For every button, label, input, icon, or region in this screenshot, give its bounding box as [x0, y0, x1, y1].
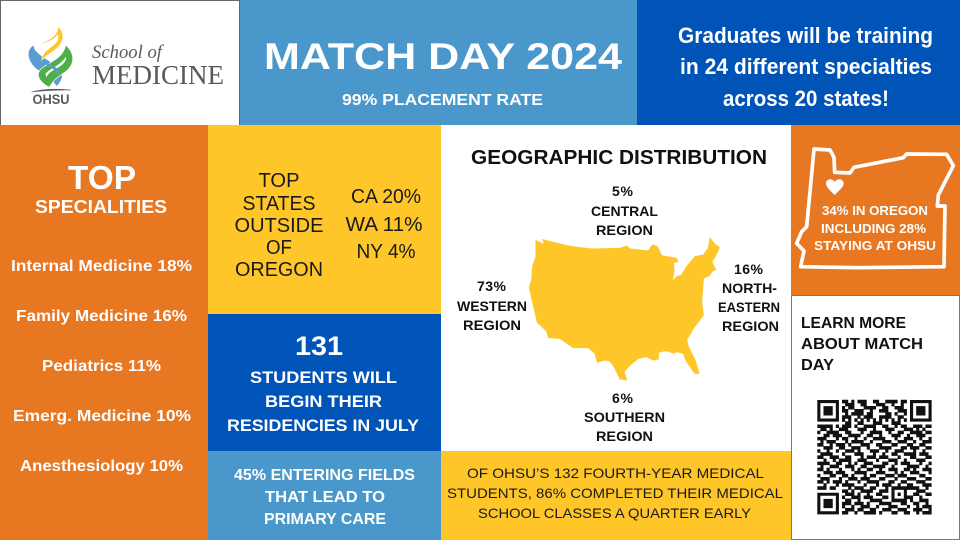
panel: 131 students: [208, 314, 441, 451]
label: northeastern region: REGION: [722, 318, 779, 334]
panel: top states outside Oregon: [208, 125, 441, 314]
label: central region: [591, 183, 658, 238]
text: primary care share: [234, 467, 415, 528]
label: western region: [457, 278, 527, 333]
label: northeastern region: EASTERN: [718, 299, 780, 315]
label: western region: REGION: [463, 317, 521, 333]
text: primary care share: THAT LEAD TO: [265, 489, 385, 506]
label: central region: 5%: [612, 183, 634, 199]
heading: specialities: SPECIALITIES: [35, 197, 167, 217]
heading: top: TOP: [68, 159, 136, 196]
icon: Oregon outline: [797, 149, 953, 268]
text: early completion note: [447, 465, 783, 521]
label: northeastern region: [718, 261, 780, 334]
label: western region: WESTERN: [457, 298, 527, 314]
logo text: School of: School of: [92, 42, 165, 63]
panel: logo: [0, 0, 240, 126]
text: summary line 2: in 24 different specialties: [680, 54, 932, 79]
text: Oregon share: 34% IN OREGON: [822, 204, 928, 218]
list item: pediatrics: Pediatrics 11%: [42, 358, 161, 375]
text: Oregon share: [814, 204, 936, 253]
text: learn more: DAY: [801, 357, 835, 374]
text: early completion note: SCHOOL CLASSES A QUARTER EARLY: [478, 505, 752, 521]
text: state percentages: [346, 186, 423, 263]
text: top states label: OUTSIDE: [234, 215, 324, 237]
text: early completion note: STUDENTS, 86% COMPLETED THEIR MEDICAL: [447, 485, 783, 501]
text: students will begin: BEGIN THEIR: [265, 393, 382, 411]
text: students will begin: RESIDENCIES IN JULY: [227, 417, 419, 435]
heading: Match Day 2024: MATCH DAY 2024: [264, 36, 622, 77]
text: Oregon share: INCLUDING 28%: [821, 222, 926, 236]
text: learn more: LEARN MORE: [801, 315, 906, 332]
label: western region: 73%: [477, 278, 507, 294]
text: state percentages: CA 20%: [351, 186, 421, 208]
text: primary care share: PRIMARY CARE: [264, 511, 386, 528]
icon: OHSU helix: [29, 26, 73, 92]
text: summary line 3: across 20 states!: [723, 86, 889, 111]
list item: internal medicine: Internal Medicine 18%: [11, 258, 192, 275]
text: placement rate: 99% PLACEMENT RATE: [342, 92, 543, 109]
text: primary care share: 45% ENTERING FIELDS: [234, 467, 415, 484]
text: students will begin: STUDENTS WILL: [250, 369, 397, 387]
text: top states label: OF: [266, 237, 292, 259]
icon: heart: [826, 179, 844, 195]
logo text: Medicine: MEDICINE: [92, 60, 224, 90]
panel: primary care: [208, 451, 441, 540]
text: top states label: OREGON: [235, 259, 323, 281]
map: United States: [529, 238, 719, 380]
text: top states label: [234, 170, 324, 281]
heading: geographic distribution: GEOGRAPHIC DISTRIBUTION: [471, 147, 767, 169]
list item: family medicine: Family Medicine 16%: [16, 308, 187, 325]
label: northeastern region: NORTH-: [722, 280, 777, 296]
list item: anesthesiology: Anesthesiology 10%: [20, 458, 183, 475]
text: top states label: STATES: [242, 193, 316, 215]
panel: early completion: [441, 451, 791, 540]
label: northeastern region: 16%: [734, 261, 764, 277]
list item: emergency medicine: Emerg. Medicine 10%: [13, 408, 191, 425]
label: central region: REGION: [596, 222, 653, 238]
text: early completion note: OF OHSU’S 132 FOURTH-YEAR MEDICAL: [467, 465, 764, 481]
panel: geographic distribution: [441, 125, 791, 451]
panel: title: [240, 0, 637, 125]
text: summary line 1: Graduates will be training: [678, 23, 933, 48]
text: top states label: TOP: [258, 170, 300, 192]
text: learn more: ABOUT MATCH: [801, 336, 923, 353]
panel: Oregon: [791, 125, 960, 295]
label: southern region: REGION: [596, 428, 653, 444]
icon: QR code: [817, 400, 932, 514]
text: learn more: [801, 315, 923, 374]
label: southern region: SOUTHERN: [584, 409, 665, 425]
logo text: OHSU: OHSU: [32, 92, 70, 107]
text: Oregon share: STAYING AT OHSU: [814, 239, 936, 253]
panel: learn more: [792, 296, 960, 540]
panel: specialties and states summary: [637, 0, 960, 125]
label: southern region: 6%: [612, 390, 634, 406]
label: central region: CENTRAL: [591, 203, 658, 219]
text: state percentages: WA 11%: [346, 214, 423, 236]
text: state percentages: NY 4%: [356, 241, 416, 263]
text: students will begin: [227, 369, 419, 435]
stat: 131: 131: [295, 331, 343, 361]
label: southern region: [584, 390, 665, 444]
panel: top specialities: [0, 125, 208, 540]
